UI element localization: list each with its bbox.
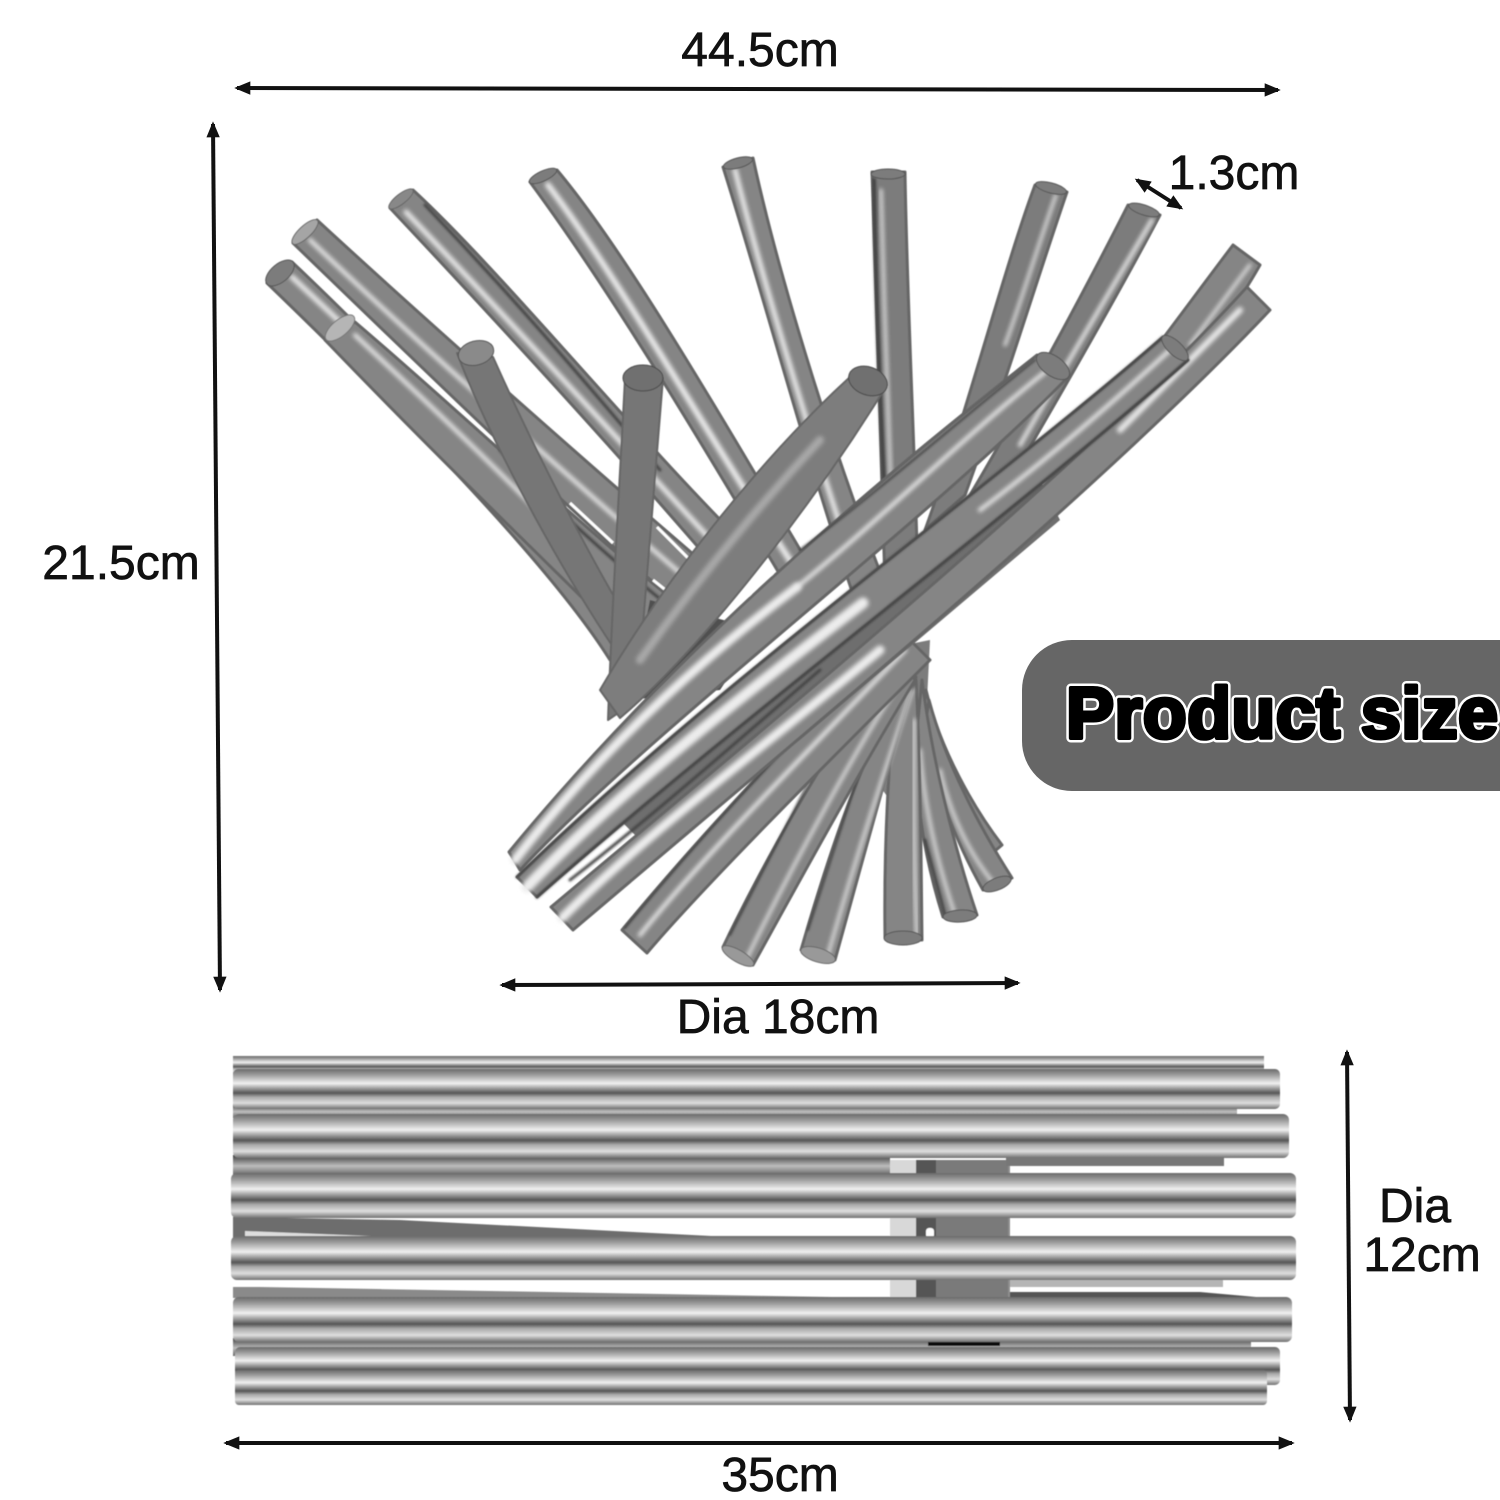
dimension: rod 1.3cm — [1137, 147, 1299, 208]
fruit bowl collapsed — [231, 1056, 1296, 1405]
badge: product size: Product size — [1066, 674, 1498, 754]
dimension: folded Dia 12cm: 12cm — [1363, 1229, 1481, 1282]
dimension: rod 1.3cm: 1.3cm — [1169, 147, 1299, 200]
badge: product size: Product size — [1066, 674, 1498, 754]
short rod diagonal — [600, 361, 892, 718]
lower fan rods right — [622, 630, 1013, 970]
fruit bowl expanded — [261, 154, 1270, 970]
interior hinge — [890, 1160, 1010, 1300]
front sweeping rods — [509, 287, 1270, 930]
dark hub shadow — [630, 600, 760, 700]
dimension: base Dia 18cm: Dia 18cm — [677, 991, 879, 1044]
back rods — [233, 1056, 1290, 1356]
short rod left — [456, 337, 640, 650]
dimension: height 21.5cm: 21.5cm — [42, 537, 200, 590]
dimension: height 21.5cm — [42, 124, 220, 990]
dimension: folded Dia 12cm: Dia — [1379, 1180, 1451, 1233]
dimension: folded Dia 12cm — [1347, 1052, 1481, 1420]
front rods — [231, 1069, 1296, 1405]
back rods upper centre and right — [500, 154, 1260, 630]
dimension: width 44.5cm: 44.5cm — [681, 24, 839, 77]
badge: product size — [1022, 640, 1500, 791]
short rod vertical — [608, 365, 663, 720]
back rods upper left — [261, 186, 745, 660]
